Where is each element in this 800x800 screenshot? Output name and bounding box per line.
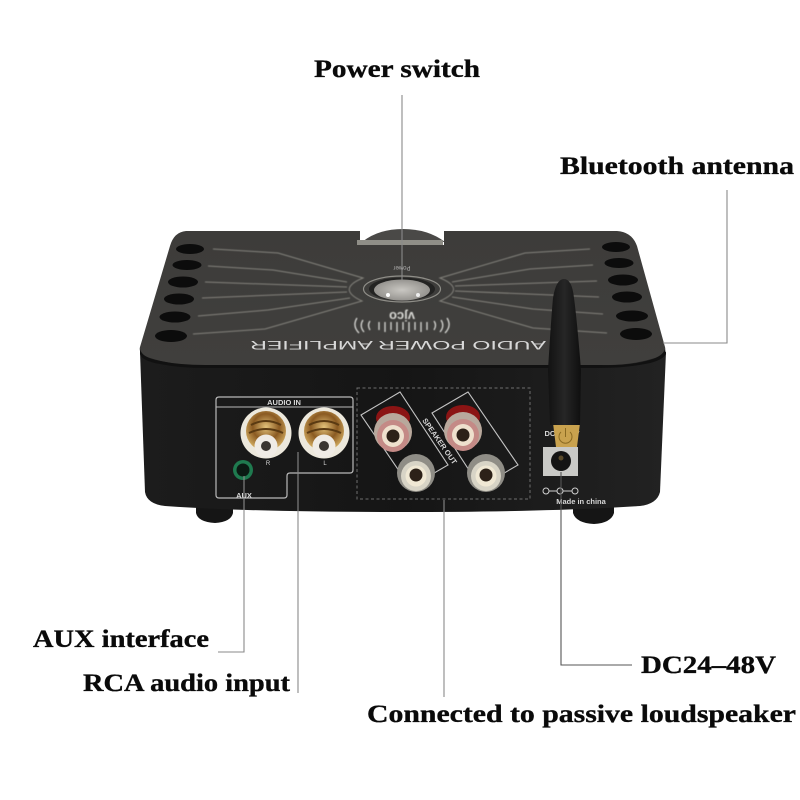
power label, printed upside down: Power [393, 264, 411, 270]
made in china text: Made in china [556, 497, 607, 506]
brand logo, printed upside down [355, 309, 449, 333]
label: bluetooth antenna: Bluetooth antenna [560, 153, 795, 180]
audio input panel [216, 397, 353, 500]
label: AUX interface: AUX interface [33, 626, 209, 653]
red binding post 1 [374, 406, 412, 452]
silver binding post 2 [467, 454, 505, 492]
audio in label: AUDIO IN [267, 398, 301, 407]
front face [140, 352, 666, 512]
RCA jack left: L [323, 461, 327, 467]
model name, printed upside down: AUDIO POWER AMPLIFIER [249, 338, 546, 352]
label: DC voltage: DC24–48V [641, 652, 776, 679]
speaker out label: SPEAKER OUT [420, 417, 459, 466]
ventilation slots, left [155, 244, 204, 342]
DC rating, mostly hidden by connector: DC24-48V [544, 429, 580, 438]
power switch dome [362, 229, 445, 242]
AUX jack: AUX [236, 491, 252, 500]
rubber feet [196, 506, 614, 524]
label: passive loudspeaker: Connected to passive loudspeaker [367, 701, 796, 728]
polarity symbol [543, 488, 578, 494]
RCA jack right: R [266, 461, 271, 467]
amplifier device [140, 229, 666, 524]
top face [140, 231, 666, 368]
ventilation slots, right [602, 242, 652, 340]
silver binding post 1 [397, 454, 435, 492]
leader lines [218, 95, 727, 697]
antenna connector [553, 423, 580, 447]
speaker output panel [357, 388, 530, 499]
bluetooth antenna [548, 279, 581, 425]
brand logo, printed upside down: vjco [389, 309, 415, 324]
DC power jack [543, 429, 607, 506]
printed ray lines on top face [193, 249, 607, 334]
power switch button [364, 276, 440, 302]
label: RCA audio input: RCA audio input [83, 670, 291, 697]
label: power switch: Power switch [314, 56, 480, 83]
red binding post 2 [444, 405, 482, 451]
